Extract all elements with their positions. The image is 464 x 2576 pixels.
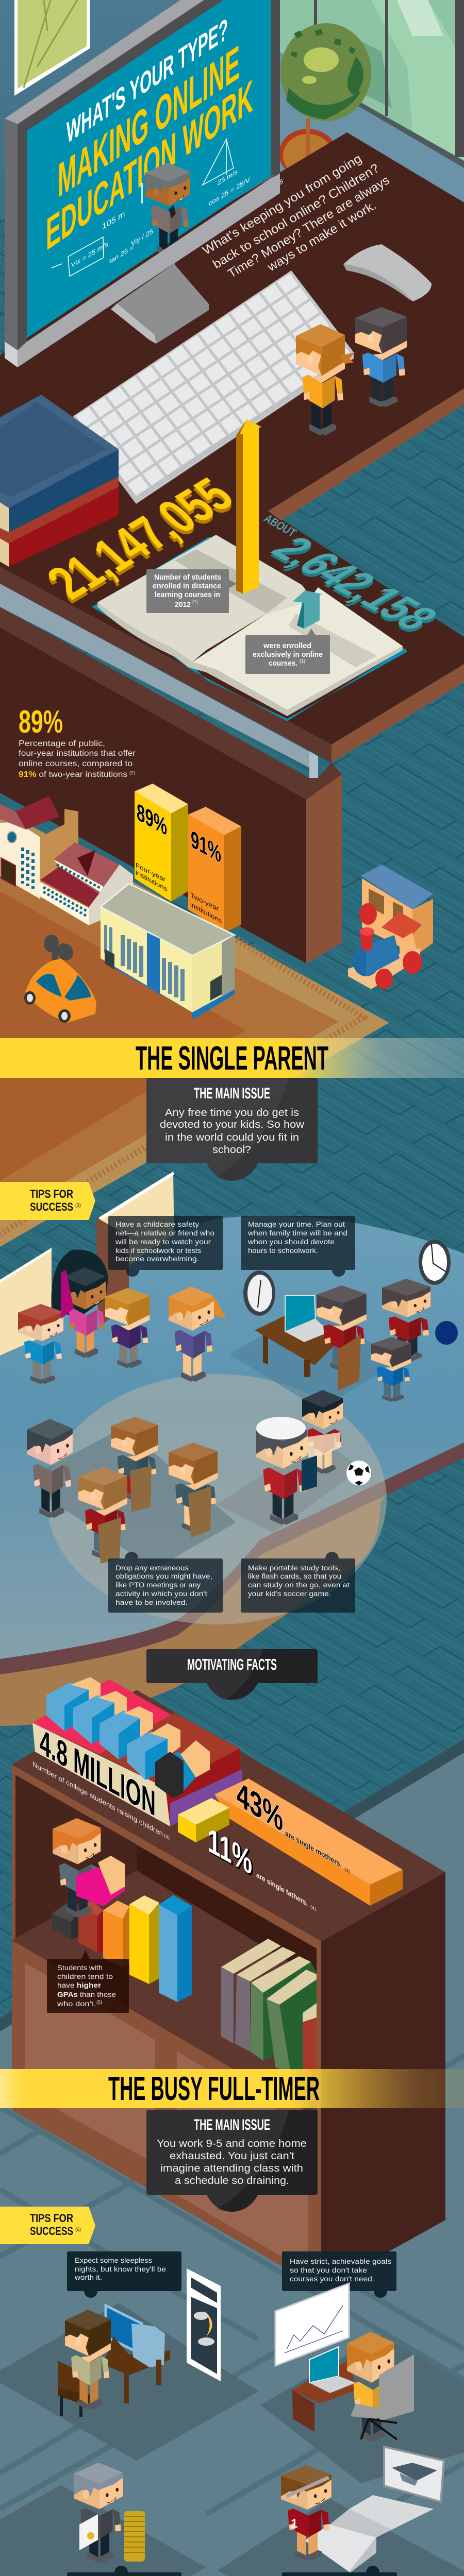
open book (92, 535, 407, 721)
tips tag: single parent (0, 1182, 95, 1220)
tip: portable study tools (241, 1552, 355, 1613)
callout: higher GPAs (47, 1950, 129, 2013)
tip: portable study tools: Make portable study tools, (248, 1564, 340, 1572)
callout: exclusively online: were enrolled (263, 641, 311, 650)
bar: 91% two-year institutions: institutions (190, 900, 222, 925)
callout: higher GPAs: children tend to (57, 1973, 113, 1980)
tip: achievable goals (282, 2251, 396, 2298)
stat: 89% institutions: Percentage of public, (19, 739, 105, 748)
teal arrow (293, 590, 322, 629)
wall and door (0, 1217, 129, 1355)
tip: drop extraneous obligations: have to be involved. (115, 1599, 188, 1606)
baby toy blocks (46, 1677, 210, 1798)
intro text on desk: Time? Money? There are always (225, 173, 392, 281)
stat: 89% institutions: online courses, compared to (19, 759, 132, 768)
tip: manage your time: hours to schoolwork. (248, 1247, 318, 1255)
callout: distance learning: 2012 (175, 600, 191, 609)
tip: drop extraneous obligations: like PTO meetings or any (115, 1581, 201, 1589)
callout: higher GPAs: who don't. (57, 2000, 96, 2008)
main issue panel: single parent (146, 1078, 318, 1181)
stat: about 2,642,158 online (260, 512, 450, 640)
chalk formulas: Vix = 25 m/s (71, 240, 108, 269)
callout: exclusively online: exclusively in online (253, 650, 323, 659)
desk (0, 132, 464, 963)
stacked blocks: 4.8 million students: Number of college students raising children (32, 1760, 163, 1838)
bar: 89% four-year institutions: institutions (136, 868, 167, 893)
plank strip under desk (0, 793, 306, 971)
stacked blocks: 4.8 million students: (4) (164, 1833, 170, 1841)
callout: exclusively online: courses. (269, 659, 297, 668)
tip: childcare safety net: Have a childcare safety (115, 1221, 199, 1228)
stat: 11% single fathers: 11% (208, 1820, 252, 1883)
bar: 91% two-year institutions (188, 807, 241, 933)
tip: drop extraneous obligations: Drop any extraneous (115, 1564, 189, 1572)
banner: the single parent (0, 1038, 464, 1078)
toy train (348, 865, 433, 989)
stat: 43% single mothers (178, 1774, 403, 1906)
toy office building (101, 884, 235, 1020)
tip: portable study tools: your kid's soccer game. (248, 1590, 331, 1598)
main issue panel: single parent: devoted to your kids. So how (160, 1119, 305, 1130)
tip: childcare safety net: net—a relative or friend who (115, 1229, 214, 1237)
callout: distance learning (146, 569, 237, 613)
man with diploma and coins (74, 2463, 145, 2563)
bookcase (12, 1690, 445, 2289)
tip: manage your time (241, 1216, 355, 1277)
tip: achievable goals: courses you don't need. (290, 2275, 374, 2283)
callout: higher GPAs: GPAs than those (57, 1991, 116, 1998)
chalk formulas: Viy / 25 (131, 227, 153, 248)
main issue panel: single parent: Any free time you do get is (165, 1107, 299, 1118)
main issue panel: single parent: school? (212, 1144, 251, 1156)
tip: portable study tools: can study on the go, even at (248, 1581, 350, 1589)
callout: distance learning: learning courses in (155, 590, 220, 599)
tip: sleepless nights: nights, but know they'll be (75, 2265, 166, 2273)
screen title (46, 11, 253, 261)
floor shadows (0, 2303, 464, 2576)
main issue panel: busy full-timer: imagine attending class with (160, 2163, 303, 2174)
tip: childcare safety net (108, 1216, 223, 1277)
tip: drop extraneous obligations: obligations you might have, (115, 1572, 212, 1580)
chalk formulas (52, 139, 284, 276)
chalk formulas: cos 25 = 25/V (209, 175, 250, 208)
runner on stairs to graduation (281, 2447, 444, 2573)
tips tag: busy full-timer (0, 2207, 95, 2244)
tip: childcare safety net: become overwhelming. (115, 1255, 199, 1263)
tip: manage your time: when family time will be and (247, 1229, 347, 1237)
stat: 43% single mothers: are single mothers. (285, 1829, 342, 1869)
stat: 21,147,055 enrolled (35, 468, 245, 612)
tips tag: single parent: (3) (75, 1202, 81, 1208)
blocks on shelf (52, 1895, 192, 2002)
second floor area (0, 1739, 464, 2576)
callout: higher GPAs: Students with (57, 1964, 103, 1972)
stat: 43% single mothers: 43% (237, 1774, 283, 1840)
callout: distance learning: (1) (192, 599, 198, 604)
main issue panel: busy full-timer: THE MAIN ISSUE (194, 2116, 270, 2133)
tip: achievable goals: Have strict, achievable goals (290, 2258, 391, 2265)
tip: childcare safety net: kids if schoolwork or tests (115, 1247, 201, 1255)
tip: online not easier (282, 2566, 397, 2576)
callout: exclusively online (245, 629, 330, 674)
bar: 89% four-year institutions: 89% (137, 798, 167, 841)
computer monitor (5, 0, 284, 367)
toy wind-up car (24, 935, 96, 1023)
chalk formulas: tan 25 = (109, 243, 134, 265)
main issue panel: busy full-timer: You work 9-5 and come home (157, 2138, 307, 2149)
stat: 89% institutions: (2) (129, 770, 135, 775)
motivating facts heading 1: MOTIVATING FACTS (187, 1655, 277, 1673)
callout: distance learning: enrolled in distance (153, 582, 221, 590)
main issue panel: single parent: in the world could you fit in (165, 1132, 299, 1143)
rug (0, 809, 389, 1247)
stat: 43% single mothers: (4) (344, 1867, 350, 1875)
tip: drop extraneous obligations (108, 1552, 223, 1613)
callout: exclusively online: (1) (300, 658, 305, 664)
bar: 89% four-year institutions (135, 784, 188, 902)
callout: higher GPAs: have higher (57, 1981, 102, 1989)
main issue panel: single parent: THE MAIN ISSUE (194, 1085, 270, 1102)
tips tag: single parent: TIPS FOR (30, 1188, 73, 1200)
tips tag: busy full-timer: SUCCESS (30, 2225, 73, 2238)
tip: vertical career move (67, 2566, 181, 2576)
stat: 11% single fathers (208, 1820, 316, 1912)
runner on stairs to graduation: 1 (291, 2517, 297, 2531)
stat: 21,147,055 enrolled: 21,147,055 (35, 468, 245, 608)
tip: manage your time: when you should devote (247, 1238, 335, 1246)
figures at keyboard (296, 307, 407, 435)
bar: 89% four-year institutions: Four-year (136, 861, 165, 884)
intro text on desk (200, 151, 392, 281)
night window (187, 2268, 221, 2381)
stacked blocks: 4.8 million students: 4.8 MILLION (40, 1721, 156, 1824)
intro text on desk: back to school online? Children? (210, 161, 382, 272)
stat: 11% single fathers: are single fathers. (256, 1871, 308, 1908)
chalk formulas: 25 m/s (218, 167, 238, 187)
tip: manage your time: Manage your time. Plan out (248, 1221, 345, 1228)
chart whiteboard and worker (275, 2283, 414, 2442)
plant behind desk (279, 23, 371, 178)
picture on wall (14, 0, 90, 96)
bar: 91% two-year institutions: 91% (191, 825, 221, 868)
mouse (343, 244, 432, 301)
tips tag: busy full-timer: TIPS FOR (30, 2212, 73, 2225)
stat: 89% institutions: 91% of two-year institutions (19, 770, 127, 779)
tip: sleepless nights (67, 2251, 181, 2298)
night worker at desk (58, 2306, 170, 2417)
stat: 21,147,055 enrolled: 21,147,055 (35, 471, 245, 612)
stat: 11% single fathers: (4) (310, 1904, 316, 1912)
tip: achievable goals: so that you don't take (290, 2266, 367, 2274)
intro text on desk: What's keeping you from going (200, 151, 364, 258)
stat: 89% institutions (19, 704, 136, 779)
stat: 11% single fathers: 11% (209, 1821, 253, 1884)
keyboard (72, 270, 354, 504)
books on shelf (221, 1939, 317, 2076)
clocks, desk and family time (243, 1240, 458, 1402)
stat: about 2,642,158 online: ABOUT (261, 512, 299, 539)
tip: sleepless nights: worth it. (74, 2274, 102, 2281)
tip: sleepless nights: Expect some sleepless (75, 2257, 152, 2264)
bar: 91% two-year institutions: Two-year (190, 891, 219, 913)
father carrying baby (53, 1818, 125, 1917)
tip: portable study tools: like flash cards, so that you (248, 1572, 341, 1580)
chalk formulas: V= 25 / cos 25 (240, 177, 284, 210)
tips tag: busy full-timer: (6) (75, 2227, 81, 2232)
parents group: mother and kids (18, 1249, 226, 1384)
teacher on screen (141, 163, 190, 256)
book stack (0, 395, 119, 567)
main issue panel: busy full-timer: a schedule so draining. (175, 2175, 289, 2187)
scene: room wall, window and floor (0, 0, 464, 2018)
callout: distance learning: Number of students (154, 573, 221, 582)
stat: 89% institutions: four-year institutions that offer (19, 749, 136, 758)
tip: drop extraneous obligations: activity in which you don't (115, 1590, 207, 1598)
classroom and soccer field figures (27, 1390, 371, 1564)
stacked blocks: 4.8 million students (32, 1679, 242, 1841)
callout: higher GPAs: (5) (96, 1999, 102, 2005)
tips tag: single parent: SUCCESS (30, 1200, 73, 1213)
toy buildings (0, 796, 133, 925)
main issue panel: busy full-timer (146, 2110, 318, 2212)
tip: childcare safety net: will be ready to watch your (115, 1238, 211, 1246)
chalk formulas: 105 m (102, 209, 125, 232)
stat: 89% institutions: 89% (19, 704, 63, 740)
motivating facts heading 1 (146, 1649, 318, 1700)
intro text on desk: ways to make it work. (264, 198, 379, 275)
classroom floor (0, 1172, 464, 1726)
yellow arrow (236, 419, 262, 594)
main issue panel: busy full-timer: exhausted. You just can't (170, 2150, 294, 2162)
